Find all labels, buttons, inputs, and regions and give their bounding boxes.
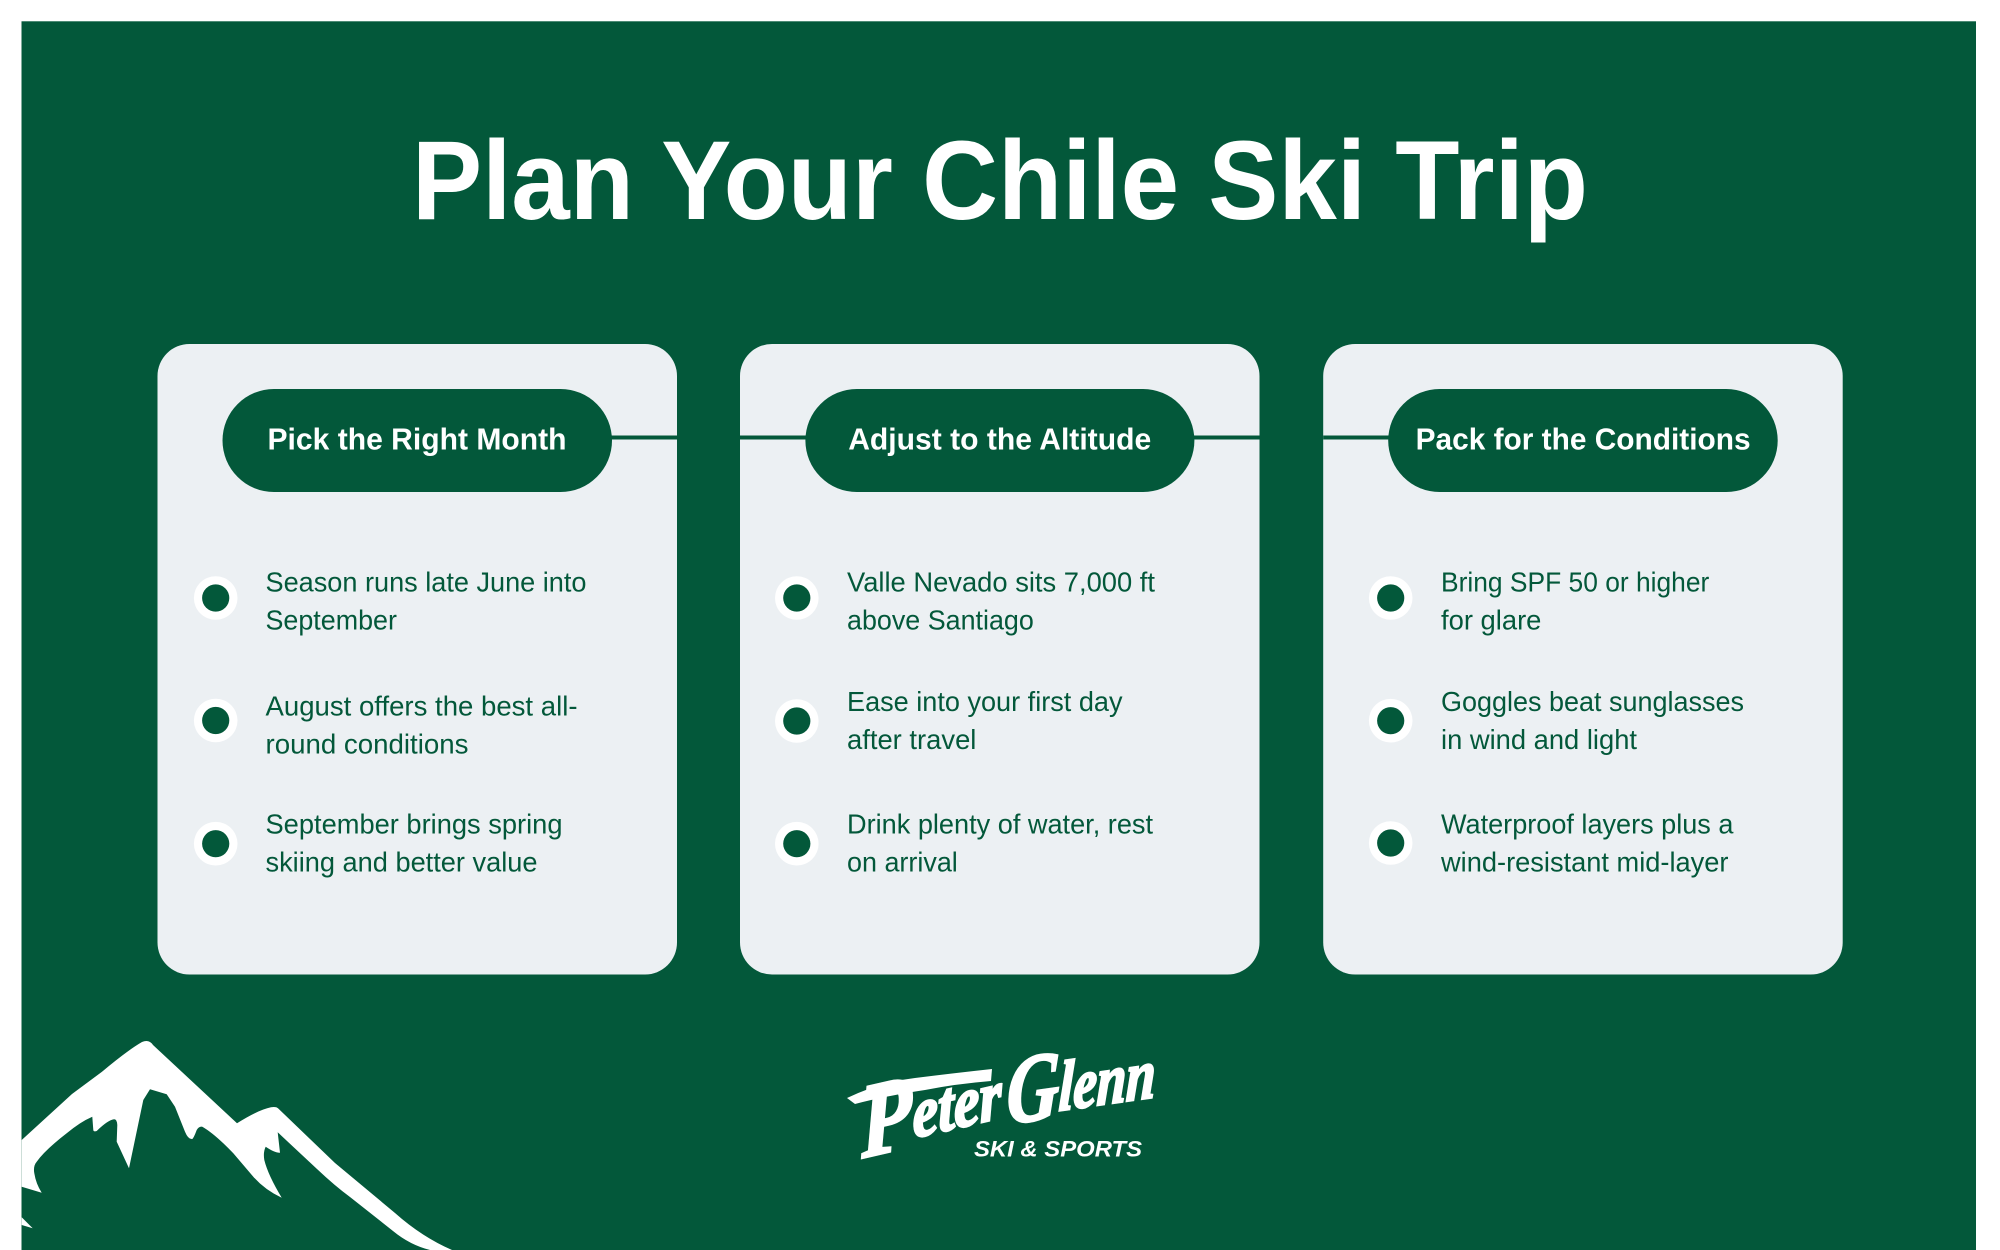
panel: pick the right month [158, 344, 677, 974]
bullet: valle nevado: above Santiago [847, 604, 1034, 636]
panel: adjust to the altitude [740, 344, 1260, 974]
bullet: goggles: Goggles beat sunglasses [1441, 686, 1744, 717]
bullet: spf [1369, 567, 1709, 636]
bullet: august: August offers the best all- [266, 691, 578, 722]
bullet: ease into [775, 686, 1122, 755]
bullet: drink water [775, 809, 1153, 878]
icon: snowy mountain [22, 1041, 452, 1250]
bullet: spf: for glare [1441, 604, 1541, 636]
logo wordmark: Peter: P [856, 1052, 916, 1181]
bullet: season: September [266, 604, 397, 636]
bullet: ease into: Ease into your first day [847, 686, 1122, 717]
bullet: ease into: after travel [847, 724, 976, 755]
bullet: september: skiing and better value [266, 846, 538, 878]
bullet: valle nevado: Valle Nevado sits 7,000 ft [847, 567, 1155, 598]
title: Plan Your Chile Ski Trip [412, 118, 1588, 243]
logo wordmark: Peter: eter [910, 1055, 1004, 1154]
logo wordmark: Glenn: G [1005, 1030, 1061, 1145]
logo flourish [847, 1069, 992, 1104]
bullet: august [194, 691, 578, 760]
bullet: waterproof layers: wind-resistant mid-layer [1440, 846, 1728, 878]
heading pill [222, 389, 612, 492]
heading pill [805, 389, 1194, 492]
logo wordmark: Glenn: lenn [1058, 1035, 1157, 1127]
bullet: waterproof layers [1369, 809, 1734, 878]
bullet: drink water: Drink plenty of water, rest [847, 809, 1153, 840]
bullet: season [194, 567, 586, 636]
heading pill: Pack for the Conditions [1416, 421, 1751, 456]
heading pill [1388, 389, 1778, 492]
logo tagline: SKI & SPORTS [974, 1137, 1142, 1162]
bullet: goggles: in wind and light [1441, 724, 1637, 755]
bullet: september: September brings spring [266, 809, 562, 840]
bullet: drink water: on arrival [847, 846, 958, 878]
bullet: spf: Bring SPF 50 or higher [1441, 567, 1709, 598]
card background [1323, 344, 1843, 974]
bullet: waterproof layers: Waterproof layers plus a [1441, 809, 1734, 840]
logo: Peter Glenn Ski & Sports [847, 1017, 1158, 1181]
card background [158, 344, 677, 974]
connector line [740, 436, 1260, 440]
bullet: season: Season runs late June into [266, 567, 586, 598]
bullet: august: round conditions [266, 728, 468, 760]
card background [740, 344, 1260, 974]
bullet: goggles [1369, 686, 1744, 755]
connector line [600, 436, 677, 440]
connector line [1323, 436, 1400, 440]
bullet: valle nevado [775, 567, 1155, 636]
heading pill: Pick the Right Month [268, 421, 566, 456]
panel: pack for the conditions [1323, 344, 1843, 974]
bullet: september [194, 809, 562, 878]
heading pill: Adjust to the Altitude [848, 421, 1151, 456]
